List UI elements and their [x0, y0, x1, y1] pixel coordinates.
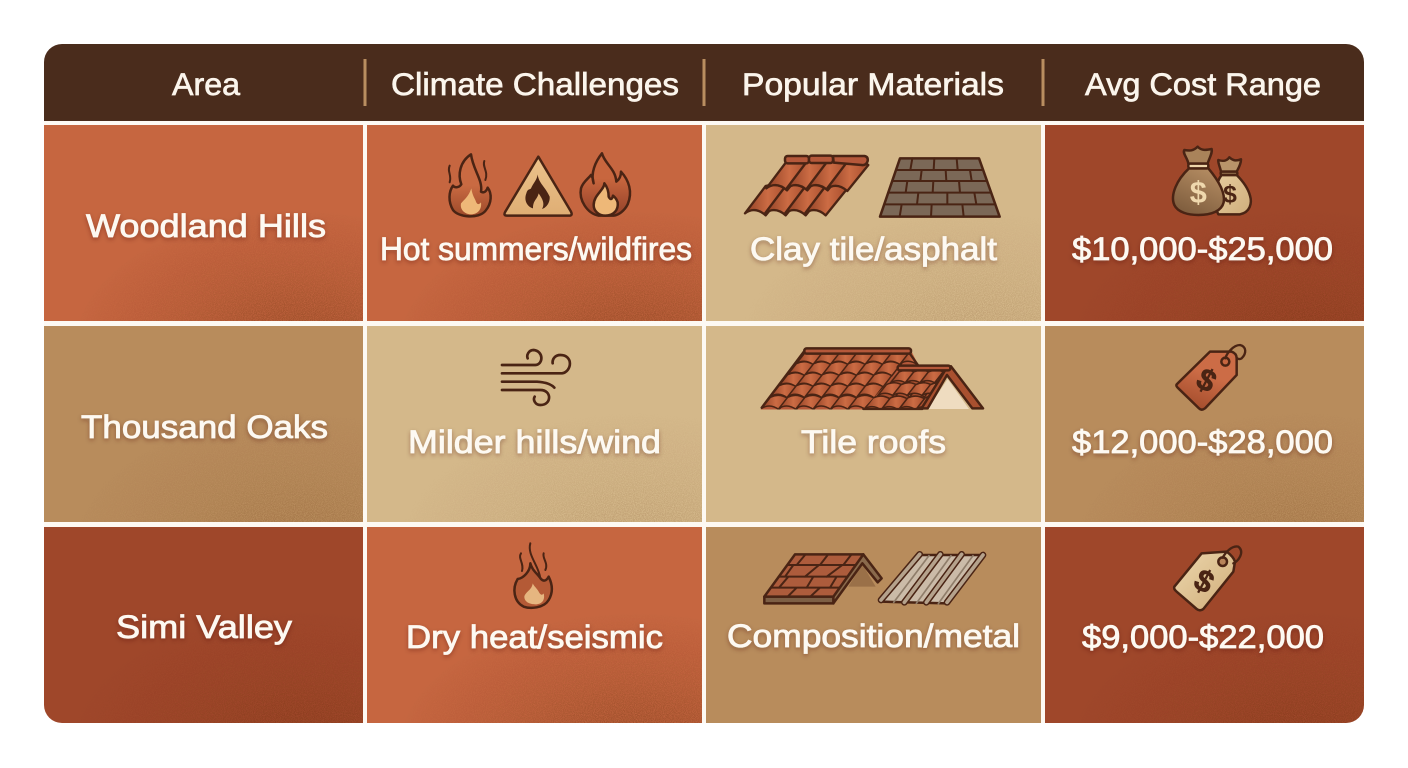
panel: Simi Valley climate [367, 527, 702, 723]
panel: Simi Valley area [44, 527, 363, 723]
icon: dry heat flame [514, 543, 552, 608]
table background gaps [44, 121, 1364, 723]
label: $12,000-$28,000: $12,000-$28,000 [1072, 424, 1333, 460]
icon: sand price tag: $ [1189, 563, 1220, 601]
label: $10,000-$25,000: $10,000-$25,000 [1072, 231, 1333, 267]
label: Simi Valley: Simi Valley [116, 609, 293, 645]
header row [44, 44, 1364, 121]
icon: clay tile [745, 156, 868, 215]
icon: flame with heat [449, 154, 491, 216]
label: Milder hills/wind: Milder hills/wind [408, 424, 661, 460]
icon: wind [502, 350, 570, 405]
label: Woodland Hills: Woodland Hills [86, 208, 326, 244]
panel: Thousand Oaks climate [367, 326, 702, 522]
icon: sand price tag [1174, 546, 1241, 610]
panel: Thousand Oaks cost [1045, 326, 1364, 522]
label: $9,000-$22,000: $9,000-$22,000 [1082, 619, 1324, 655]
icon: tile roof [760, 348, 983, 410]
label: Hot summers/wildfires: Hot summers/wildfires [380, 231, 692, 267]
large money bag: $ [1190, 175, 1207, 209]
panel: Thousand Oaks materials [706, 326, 1041, 522]
header background [44, 44, 1364, 121]
icon: clay tile and asphalt [745, 156, 1000, 217]
panel: Thousand Oaks area [44, 326, 363, 522]
icon: wildfire flame [581, 153, 630, 216]
icon: terracotta price tag: $ [1191, 362, 1222, 400]
panel: Woodland Hills cost [1045, 125, 1364, 321]
panel: Simi Valley materials [706, 527, 1041, 723]
label: Composition/metal: Composition/metal [727, 618, 1020, 654]
panel: Woodland Hills materials [706, 125, 1041, 321]
gable roof [862, 366, 983, 410]
label: Thousand Oaks: Thousand Oaks [81, 409, 328, 445]
panel: Simi Valley cost [1045, 527, 1364, 723]
label: Tile roofs: Tile roofs [801, 424, 946, 460]
icon: asphalt shingles [880, 158, 1000, 217]
icon: money bags [1173, 147, 1251, 215]
small money bag: $ [1223, 182, 1237, 209]
icon: composition shingles [764, 554, 882, 603]
icon: fire hazards [449, 153, 630, 216]
icon: composition and metal roofing [764, 554, 983, 604]
main roof [760, 348, 926, 410]
header: Avg Cost Range: Avg Cost Range [1085, 66, 1321, 102]
icon: terracotta price tag [1176, 345, 1245, 410]
panel: Woodland Hills area [44, 125, 363, 321]
header: Climate Challenges: Climate Challenges [391, 66, 679, 102]
icon: metal roofing [881, 554, 983, 604]
icon: fire warning triangle [504, 157, 572, 216]
panel: Woodland Hills climate [367, 125, 702, 321]
header: Popular Materials: Popular Materials [742, 66, 1004, 102]
header: Area: Area [172, 66, 240, 102]
label: Clay tile/asphalt: Clay tile/asphalt [750, 231, 997, 267]
label: Dry heat/seismic: Dry heat/seismic [406, 619, 663, 655]
